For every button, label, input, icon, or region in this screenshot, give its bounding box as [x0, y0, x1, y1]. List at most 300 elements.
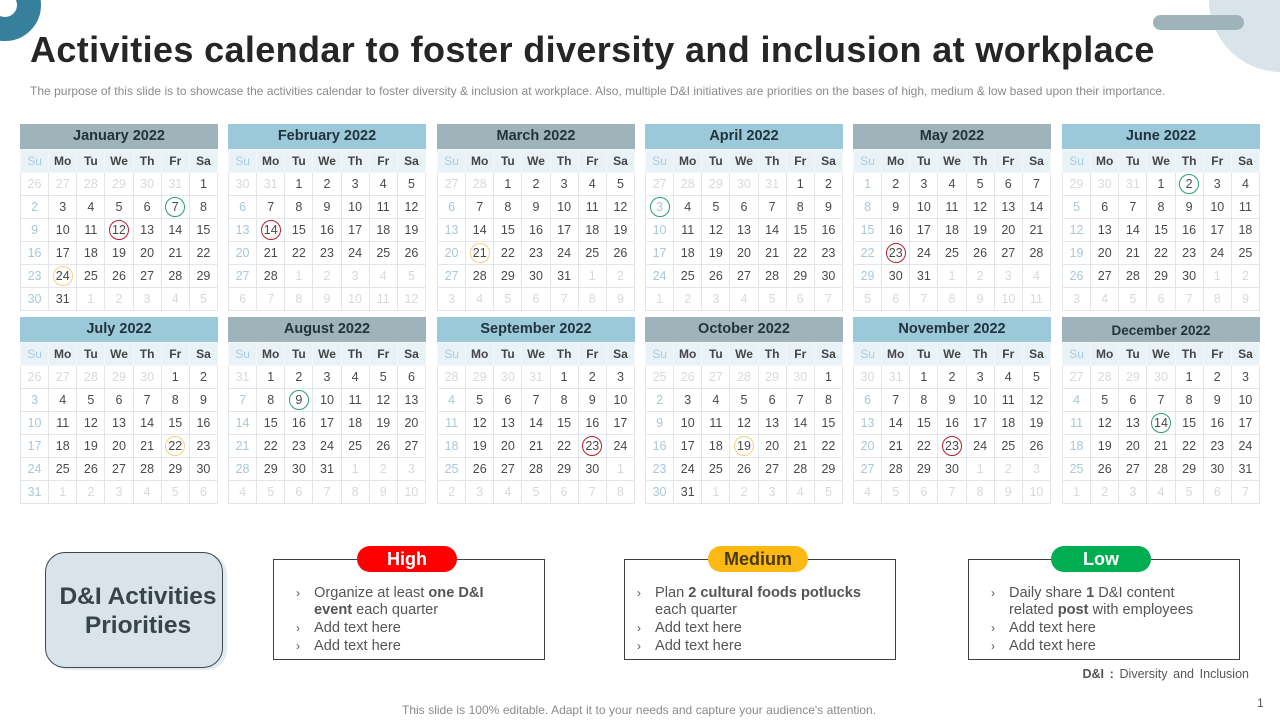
- date grid: Fr: [377, 347, 389, 361]
- date grid: 8: [1186, 393, 1193, 407]
- date grid: 12: [376, 393, 390, 407]
- date grid: 25: [681, 269, 695, 283]
- list: high priority activities: Add text here: [314, 620, 401, 636]
- date grid: 10: [348, 292, 362, 306]
- date grid: 30: [501, 370, 515, 384]
- month heading: July 2022: [86, 321, 152, 337]
- date grid: 1: [825, 370, 832, 384]
- high priority date: [942, 436, 962, 456]
- date grid: Tu: [1126, 154, 1140, 168]
- date grid: 24: [28, 462, 42, 476]
- date grid: 25: [84, 269, 98, 283]
- date grid: 14: [168, 223, 182, 237]
- date grid: 4: [144, 485, 151, 499]
- date grid: 17: [917, 223, 931, 237]
- date grid: 5: [977, 177, 984, 191]
- label: Medium: [708, 546, 808, 572]
- date grid: 3: [352, 269, 359, 283]
- date grid: 4: [949, 177, 955, 191]
- date grid: 21: [765, 246, 779, 260]
- date grid: 28: [140, 462, 154, 476]
- date grid: 29: [1070, 177, 1084, 191]
- date grid: 28: [473, 177, 487, 191]
- date grid: 28: [765, 269, 779, 283]
- medium priority date: [734, 436, 754, 456]
- date grid: Su: [860, 154, 875, 168]
- date grid: 30: [1182, 269, 1196, 283]
- date grid: 25: [1070, 462, 1084, 476]
- date grid: 9: [533, 200, 539, 214]
- date grid: 15: [292, 223, 306, 237]
- month heading: [437, 124, 635, 149]
- date grid: 4: [380, 177, 387, 191]
- date grid: 14: [1126, 223, 1140, 237]
- text: ›: [991, 639, 995, 653]
- date grid: 9: [656, 416, 663, 430]
- date grid: 2: [892, 177, 899, 191]
- date grid: 19: [376, 416, 390, 430]
- date grid: 31: [168, 177, 182, 191]
- date grid: 1: [200, 177, 207, 191]
- date grid: 26: [1070, 269, 1084, 283]
- date grid: 9: [825, 200, 832, 214]
- date grid: [853, 342, 1051, 504]
- date grid: Th: [140, 154, 154, 168]
- date grid: 8: [561, 393, 568, 407]
- date grid: 28: [473, 269, 487, 283]
- date grid: 24: [613, 439, 627, 453]
- date grid: 12: [404, 200, 418, 214]
- date grid: Fr: [586, 347, 598, 361]
- date grid: 6: [295, 485, 302, 499]
- date grid: 9: [1005, 485, 1012, 499]
- date grid: Mo: [54, 347, 71, 361]
- date grid: 4: [59, 393, 66, 407]
- date grid: 29: [765, 370, 779, 384]
- date grid: Su: [235, 154, 250, 168]
- date grid: 9: [200, 393, 207, 407]
- date grid: Tu: [292, 347, 306, 361]
- date grid: 5: [741, 393, 747, 407]
- date grid: 16: [889, 223, 903, 237]
- date grid: 1: [712, 485, 719, 499]
- date grid: 29: [709, 177, 723, 191]
- date grid: 4: [1158, 485, 1164, 499]
- calendar: March 2022: [437, 124, 635, 311]
- date grid: 19: [1029, 416, 1043, 430]
- date grid: 8: [1214, 292, 1221, 306]
- date grid: 7: [1129, 200, 1136, 214]
- month heading: [1062, 124, 1260, 149]
- date grid: 31: [264, 177, 278, 191]
- date grid: 27: [56, 177, 70, 191]
- date grid: 11: [1070, 416, 1083, 430]
- text: ›: [296, 639, 300, 653]
- date grid: 15: [1154, 223, 1168, 237]
- month heading: April 2022: [709, 128, 779, 144]
- date grid: 1: [267, 370, 274, 384]
- date grid: Su: [652, 154, 667, 168]
- date grid: 8: [797, 200, 804, 214]
- date grid: 28: [168, 269, 182, 283]
- date grid: 28: [681, 177, 695, 191]
- date grid: 17: [348, 223, 362, 237]
- date grid: 25: [1238, 246, 1252, 260]
- date grid: 28: [84, 370, 98, 384]
- date grid: 23: [821, 246, 835, 260]
- date grid: 27: [1126, 462, 1140, 476]
- date grid: 14: [793, 416, 807, 430]
- date grid: 2: [295, 370, 302, 384]
- date grid: 30: [529, 269, 543, 283]
- low priority date: 14: [1154, 416, 1168, 430]
- date grid: Sa: [821, 347, 836, 361]
- date grid: [20, 149, 218, 311]
- date grid: 4: [239, 485, 246, 499]
- date grid: 23: [28, 269, 42, 283]
- date grid: 1: [1073, 485, 1080, 499]
- date grid: Su: [27, 347, 42, 361]
- date grid: 20: [1001, 223, 1015, 237]
- date grid: 18: [445, 439, 459, 453]
- date grid: 22: [196, 246, 210, 260]
- date grid: 16: [320, 223, 334, 237]
- date grid: Tu: [709, 154, 723, 168]
- date grid: 27: [1001, 246, 1015, 260]
- date grid: 1: [561, 370, 568, 384]
- date grid: Sa: [196, 347, 211, 361]
- date grid: Th: [765, 154, 779, 168]
- date grid: 28: [1154, 462, 1168, 476]
- date grid: 5: [769, 292, 776, 306]
- date grid: Fr: [1211, 154, 1223, 168]
- date grid: 13: [112, 416, 126, 430]
- date grid: 28: [529, 462, 543, 476]
- date grid: 31: [889, 370, 903, 384]
- date grid: Fr: [794, 154, 806, 168]
- date grid: 1: [797, 177, 804, 191]
- date grid: Sa: [196, 154, 211, 168]
- list: high priority activities: Add text here: [314, 638, 401, 654]
- date grid: 5: [504, 292, 511, 306]
- date grid: 12: [1070, 223, 1084, 237]
- date grid: 6: [1129, 393, 1136, 407]
- date grid: 8: [617, 485, 624, 499]
- date grid: 23: [1182, 246, 1196, 260]
- date grid: 2: [200, 370, 207, 384]
- date grid: 10: [681, 416, 695, 430]
- date grid: 6: [561, 485, 568, 499]
- date grid: 22: [1154, 246, 1168, 260]
- date grid: We: [1152, 347, 1170, 361]
- medium priority date: [165, 436, 185, 456]
- date grid: 1: [1186, 370, 1193, 384]
- date grid: 27: [1070, 370, 1084, 384]
- date grid: 3: [617, 370, 624, 384]
- text: ›: [296, 586, 300, 600]
- date grid: 13: [445, 223, 459, 237]
- date grid: 24: [557, 246, 571, 260]
- date grid: 6: [920, 485, 927, 499]
- date grid: 25: [1001, 439, 1015, 453]
- date grid: 1: [295, 177, 302, 191]
- date grid: 17: [1238, 416, 1252, 430]
- date grid: 17: [653, 246, 667, 260]
- date grid: 2: [741, 485, 747, 499]
- panel: D&I Activities Priorities: D&I Activities: [59, 583, 217, 610]
- label: High: [357, 546, 457, 572]
- date grid: 4: [1005, 370, 1012, 384]
- date grid: Sa: [613, 347, 628, 361]
- list: medium priority activities: Add text here: [655, 638, 742, 654]
- date grid: Sa: [404, 154, 419, 168]
- date grid: 8: [589, 292, 596, 306]
- date grid: 10: [320, 393, 334, 407]
- month heading: August 2022: [284, 321, 370, 337]
- date grid: 27: [445, 269, 459, 283]
- page number: 1: [1257, 696, 1264, 710]
- date grid: 29: [264, 462, 278, 476]
- date grid: We: [110, 154, 128, 168]
- date grid: 2: [324, 177, 330, 191]
- date grid: 21: [1154, 439, 1168, 453]
- date grid: Th: [140, 347, 154, 361]
- date grid: [437, 149, 635, 311]
- date grid: 28: [793, 462, 807, 476]
- high priority date: [886, 243, 906, 263]
- date grid: Tu: [84, 154, 98, 168]
- text: ›: [296, 621, 300, 635]
- date grid: 5: [476, 393, 483, 407]
- date grid: 14: [236, 416, 250, 430]
- date grid: 5: [380, 370, 387, 384]
- date grid: 29: [793, 269, 807, 283]
- date grid: 25: [709, 462, 723, 476]
- date grid: 22: [861, 246, 875, 260]
- date grid: 10: [653, 223, 667, 237]
- date grid: 18: [681, 246, 695, 260]
- date grid: 10: [973, 393, 987, 407]
- medium priority date: 24: [56, 269, 70, 283]
- date grid: 27: [709, 370, 723, 384]
- date grid: 11: [1002, 393, 1015, 407]
- date grid: 30: [793, 370, 807, 384]
- date grid: Tu: [709, 347, 723, 361]
- date grid: 31: [529, 370, 543, 384]
- date grid: 3: [1073, 292, 1080, 306]
- date grid: 20: [501, 439, 515, 453]
- date grid: 20: [737, 246, 751, 260]
- date grid: 21: [168, 246, 182, 260]
- date grid: 18: [376, 223, 390, 237]
- date grid: 4: [684, 200, 691, 214]
- date grid: 3: [1005, 269, 1012, 283]
- date grid: [437, 342, 635, 504]
- date grid: Mo: [679, 154, 696, 168]
- date grid: 5: [1033, 370, 1040, 384]
- date grid: 30: [889, 269, 903, 283]
- date grid: 27: [765, 462, 779, 476]
- decorative pale circle, top right: [1209, 0, 1280, 72]
- date grid: 6: [504, 393, 511, 407]
- date grid: 19: [473, 439, 487, 453]
- date grid: 9: [589, 393, 596, 407]
- calendar: June 2022: [1062, 124, 1260, 311]
- date grid: Fr: [794, 347, 806, 361]
- date grid: 28: [445, 370, 459, 384]
- date grid: 11: [445, 416, 458, 430]
- date grid: Sa: [1029, 347, 1044, 361]
- date grid: 2: [324, 269, 330, 283]
- date grid: 2: [1005, 462, 1012, 476]
- date grid: 1: [295, 269, 302, 283]
- date grid: 27: [653, 177, 667, 191]
- date grid: 7: [533, 393, 539, 407]
- date grid: 1: [352, 462, 359, 476]
- date grid: 3: [116, 485, 122, 499]
- date grid: 30: [821, 269, 835, 283]
- date grid: 3: [59, 200, 66, 214]
- date grid: 30: [1210, 462, 1224, 476]
- date grid: 23: [529, 246, 543, 260]
- date grid: 29: [112, 370, 126, 384]
- date grid: 25: [56, 462, 70, 476]
- date grid: 11: [681, 223, 694, 237]
- date grid: 23: [320, 246, 334, 260]
- date grid: 26: [1098, 462, 1112, 476]
- title: Activities calendar to foster diversity and inclusion at workplace: [30, 29, 1155, 70]
- date grid: 10: [404, 485, 418, 499]
- date grid: Mo: [887, 347, 904, 361]
- date grid: 9: [324, 200, 330, 214]
- date grid: 16: [585, 416, 599, 430]
- date grid: Tu: [917, 347, 931, 361]
- date grid: 18: [585, 223, 599, 237]
- date grid: 27: [861, 462, 875, 476]
- date grid: 30: [140, 177, 154, 191]
- date grid: 3: [324, 370, 330, 384]
- date grid: 11: [1030, 292, 1043, 306]
- date grid: 11: [946, 200, 958, 214]
- date grid: 9: [380, 485, 387, 499]
- date grid: 3: [684, 393, 691, 407]
- date grid: 7: [589, 485, 596, 499]
- date grid: 8: [267, 393, 274, 407]
- date grid: 1: [617, 462, 624, 476]
- date grid: 29: [861, 269, 875, 283]
- list: low priority activities: Add text here: [1009, 638, 1096, 654]
- date grid: 7: [267, 292, 274, 306]
- date grid: 13: [1098, 223, 1112, 237]
- date grid: 26: [681, 370, 695, 384]
- date grid: [228, 149, 426, 311]
- date grid: [1062, 149, 1260, 311]
- date grid: 31: [1238, 462, 1252, 476]
- date grid: 11: [1239, 200, 1252, 214]
- date grid: Su: [444, 347, 459, 361]
- date grid: 19: [112, 246, 126, 260]
- date grid: 3: [1214, 177, 1221, 191]
- list: medium priority activities: Plan 2 cultural foods potlucks: [655, 584, 861, 600]
- date grid: 25: [445, 462, 459, 476]
- date grid: 9: [31, 223, 38, 237]
- date grid: 17: [1210, 223, 1224, 237]
- date grid: 31: [917, 269, 931, 283]
- date grid: 5: [408, 177, 415, 191]
- date grid: 20: [112, 439, 126, 453]
- date grid: 6: [1214, 485, 1221, 499]
- date grid: 4: [1073, 393, 1080, 407]
- month heading: March 2022: [496, 128, 576, 144]
- date grid: Fr: [1002, 154, 1014, 168]
- date grid: 21: [236, 439, 250, 453]
- date grid: 6: [769, 393, 776, 407]
- high priority date: 14: [264, 223, 278, 237]
- date grid: 31: [236, 370, 250, 384]
- date grid: 2: [87, 485, 94, 499]
- date grid: 21: [1126, 246, 1140, 260]
- date grid: 20: [445, 246, 459, 260]
- date grid: 29: [168, 462, 182, 476]
- panel: D&I Activities Priorities: Priorities: [85, 612, 191, 639]
- month heading: [853, 124, 1051, 149]
- date grid: 29: [917, 462, 931, 476]
- panel box: high priority: [273, 559, 545, 660]
- date grid: We: [527, 154, 545, 168]
- date grid: 4: [87, 200, 94, 214]
- date grid: 27: [236, 269, 250, 283]
- date grid: 3: [1242, 370, 1249, 384]
- date grid: [645, 342, 843, 504]
- date grid: 9: [949, 393, 955, 407]
- date grid: Mo: [471, 154, 488, 168]
- date grid: Fr: [586, 154, 598, 168]
- list: low priority activities: related post with employees: [1009, 602, 1193, 618]
- date grid: 24: [917, 246, 931, 260]
- date grid: 16: [945, 416, 959, 430]
- date grid: 4: [741, 292, 747, 306]
- date grid: 24: [1210, 246, 1224, 260]
- date grid: We: [735, 154, 753, 168]
- date grid: 31: [681, 485, 695, 499]
- date grid: 3: [1033, 462, 1040, 476]
- date grid: 21: [529, 439, 543, 453]
- date grid: 6: [797, 292, 804, 306]
- date grid: 29: [821, 462, 835, 476]
- text: ›: [991, 621, 995, 635]
- date grid: 6: [864, 393, 871, 407]
- date grid: 10: [1238, 393, 1252, 407]
- date grid: 3: [561, 177, 568, 191]
- date grid: 23: [196, 439, 210, 453]
- medium priority date: 21: [473, 246, 487, 260]
- date grid: 10: [56, 223, 70, 237]
- month heading: June 2022: [1126, 128, 1196, 144]
- date grid: 30: [737, 177, 751, 191]
- date grid: 20: [861, 439, 875, 453]
- date grid: 30: [236, 177, 250, 191]
- date grid: 12: [473, 416, 487, 430]
- date grid: 7: [1186, 292, 1193, 306]
- date grid: Su: [444, 154, 459, 168]
- date grid: 19: [1098, 439, 1112, 453]
- date grid: 1: [87, 292, 94, 306]
- date grid: 14: [473, 223, 487, 237]
- date grid: 10: [917, 200, 931, 214]
- date grid: 5: [1101, 393, 1108, 407]
- date grid: 17: [973, 416, 987, 430]
- date grid: 3: [977, 370, 984, 384]
